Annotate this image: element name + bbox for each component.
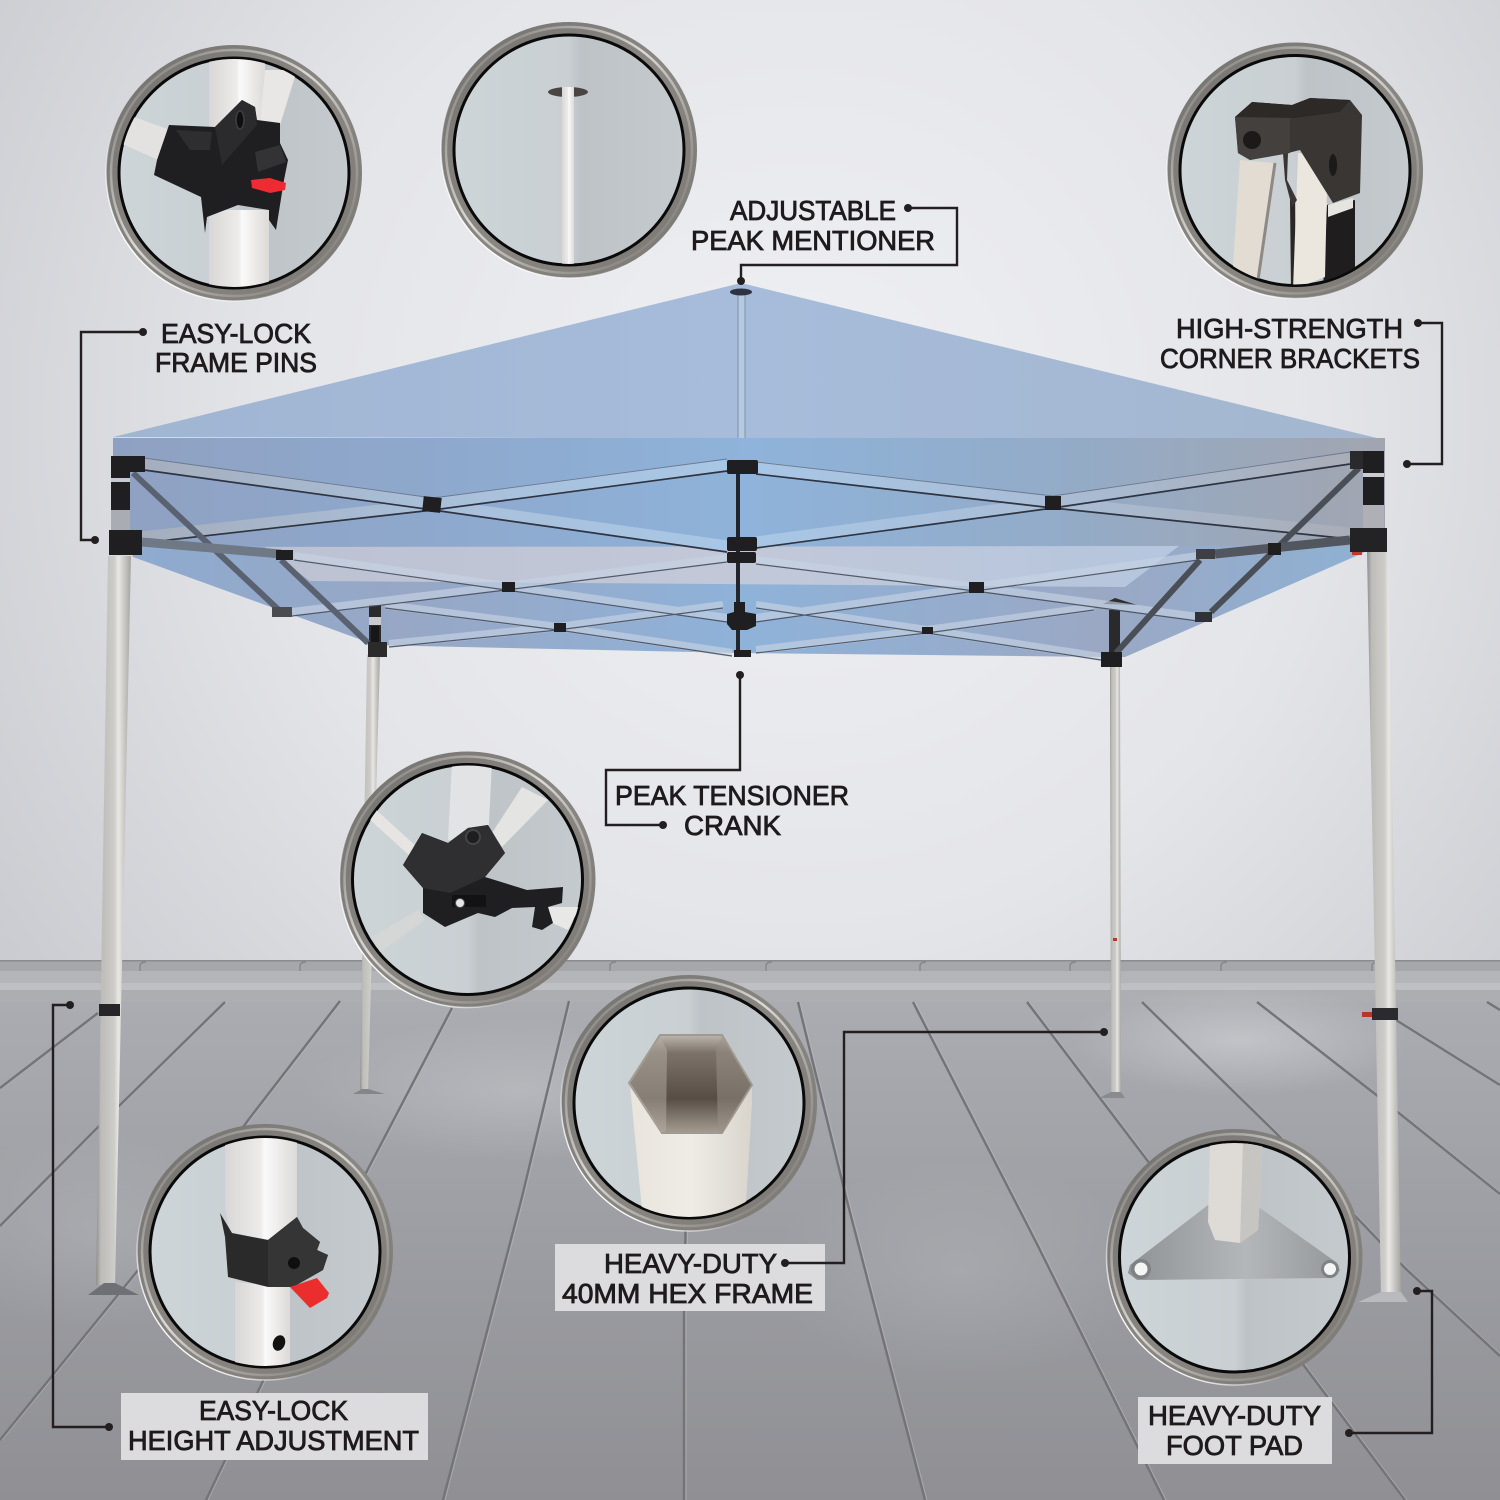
front right leg with corner brackets (1350, 451, 1408, 1302)
label: peak tensioner crank (615, 780, 849, 841)
canopy underside upper band (113, 438, 1385, 547)
label: adjustable peak mentioner (691, 195, 935, 256)
leader line: easy-lock height adjustment (53, 1001, 113, 1431)
leader line: easy-lock frame pins (81, 328, 147, 544)
side truss diagonals, left (133, 473, 368, 643)
label: easy-lock height adjustment: HEIGHT ADJUSTMENT (128, 1425, 419, 1456)
label: easy-lock frame pins (155, 318, 317, 378)
detail circle: corner bracket (1167, 42, 1423, 298)
canopy tent (88, 283, 1408, 1302)
canopy roof (113, 283, 1385, 440)
canopy lighter inner panel (265, 546, 1179, 587)
background: wood plank floor (0, 985, 1500, 1500)
leader line: heavy-duty foot pad (1345, 1287, 1432, 1437)
detail circle: height adjustment latch (137, 1124, 393, 1380)
side truss diagonals, right (1116, 468, 1359, 653)
label: adjustable peak mentioner: PEAK MENTIONER (691, 225, 935, 256)
label: heavy-duty 40mm hex frame: 40MM HEX FRAME (562, 1278, 813, 1309)
label: high-strength corner brackets (1160, 313, 1420, 374)
label: heavy-duty foot pad (1138, 1397, 1332, 1464)
scissor truss bars, front row (142, 452, 1350, 552)
label: heavy-duty 40mm hex frame (555, 1244, 825, 1311)
label: heavy-duty foot pad: FOOT PAD (1166, 1430, 1303, 1461)
detail circle: peak mentioner pole (441, 22, 697, 278)
leader line: heavy-duty hex frame (781, 1028, 1108, 1267)
label: peak tensioner crank: PEAK TENSIONER (615, 780, 849, 811)
label: easy-lock height adjustment: EASY-LOCK (199, 1395, 348, 1426)
leader line: adjustable peak mentioner (737, 204, 957, 285)
label: peak tensioner crank: CRANK (684, 810, 781, 841)
detail circle: easy-lock frame pins (106, 45, 362, 301)
back right leg (1099, 598, 1137, 1098)
label: high-strength corner brackets: CORNER BRACKETS (1160, 343, 1420, 374)
label: adjustable peak mentioner: ADJUSTABLE (730, 195, 896, 226)
adjustable peak pole seen through roof (730, 288, 752, 463)
detail circle: hex frame tube (561, 975, 817, 1231)
front left leg with corner brackets (88, 456, 145, 1295)
label: easy-lock frame pins: FRAME PINS (155, 347, 317, 378)
detail circle: foot pad (1106, 1129, 1362, 1385)
centre truss post (736, 465, 740, 650)
truss brackets (272, 460, 1281, 667)
scissor truss bars, back rows (292, 556, 1198, 660)
background: wall (0, 0, 1500, 962)
label: heavy-duty 40mm hex frame: HEAVY-DUTY (604, 1248, 777, 1279)
back left leg (353, 605, 385, 1094)
canopy underside lower panel (130, 546, 1370, 657)
background: baseboard (0, 960, 1500, 1002)
label: high-strength corner brackets: HIGH-STRENGTH (1176, 313, 1403, 344)
leader line: peak tensioner crank (606, 671, 744, 829)
leader line: high-strength corner brackets (1403, 319, 1442, 468)
label: heavy-duty foot pad: HEAVY-DUTY (1148, 1400, 1321, 1431)
label: easy-lock height adjustment (121, 1393, 428, 1460)
detail circle: peak tensioner crank (340, 752, 596, 1008)
label: easy-lock frame pins: EASY-LOCK (161, 318, 311, 349)
